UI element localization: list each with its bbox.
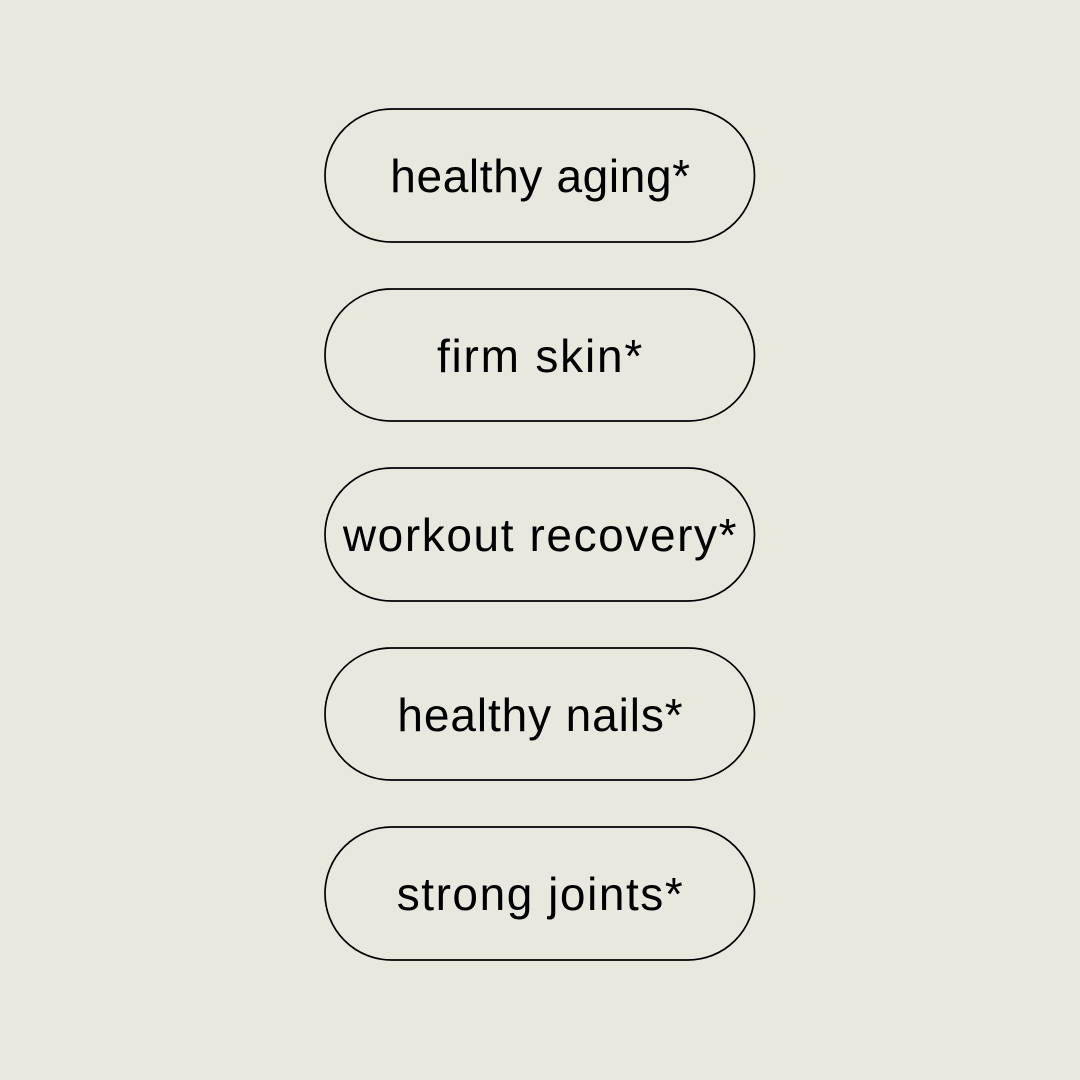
pill: healthy nails: [325, 648, 754, 780]
pill: firm skin: firm skin*: [437, 330, 644, 382]
pill: firm skin: [325, 289, 754, 421]
pill: healthy aging: [325, 109, 754, 242]
pill: workout recovery: [325, 468, 754, 601]
pill: healthy aging: healthy aging*: [390, 150, 691, 202]
pill: strong joints: [325, 827, 754, 960]
pill: healthy nails: healthy nails*: [397, 689, 684, 741]
pill: strong joints: strong joints*: [397, 868, 684, 920]
pill: workout recovery: workout recovery*: [342, 509, 738, 561]
